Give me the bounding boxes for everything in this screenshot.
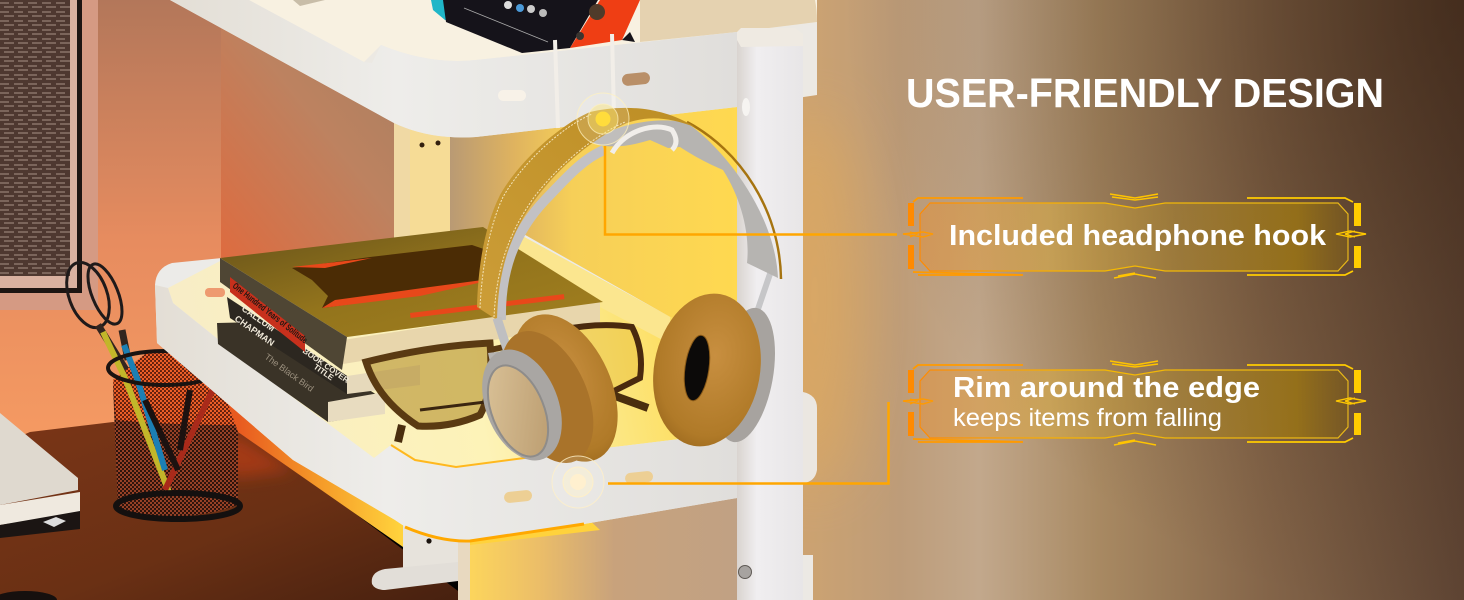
background wall left [0,0,461,440]
marker: headphone hook [577,93,629,145]
headband padding [590,120,778,278]
top shelf surface [249,0,817,62]
tan leather band [477,108,695,320]
lower shelf [155,232,737,541]
right end of lower shelf [803,392,817,483]
background wall right [765,0,1464,600]
top book: One Hundred Years of Solitude [231,281,309,345]
thin silver band [501,150,604,320]
bottom book [217,322,385,422]
bottom book: The Black Bird [263,352,316,394]
top book [220,227,603,370]
under-shelf light strip [225,395,600,547]
callout: rim around the edge: Rim around the edge [953,372,1260,404]
framed map poster [0,0,98,310]
middle book [227,297,420,394]
title: USER-FRIENDLY DESIGN [906,70,1384,116]
scissors [59,257,129,370]
middle book: BOOK COVER [301,346,351,385]
callout: rim around the edge: keeps items from falling [953,404,1222,432]
headphones [467,108,784,478]
connector line: rim [608,402,888,484]
connector line: hook [605,146,897,234]
yellow lit back panel [450,100,740,400]
stacked books on desk [0,413,80,538]
vertical post [737,28,813,600]
marker: shelf rim [552,456,604,508]
back pole [394,120,450,245]
callout: rim around the edge [903,361,1366,445]
panel under lower shelf [458,495,743,600]
middle book: CHAPMAN [233,313,276,348]
shelf clamp [372,525,470,600]
right ear cup [641,268,784,455]
headphone hook straps [555,34,614,128]
callout: included headphone hook [903,194,1366,278]
middle book: TITLE [312,362,336,383]
book stack on shelf [217,227,603,422]
hook [612,127,676,153]
shelf surface [168,233,737,467]
game console [293,0,640,53]
left ear cup [467,298,639,478]
top shelf [170,0,817,137]
pen holder [59,257,240,519]
wooden desk [0,422,470,600]
callout: included headphone hook: Included headphone hook [949,220,1327,252]
middle book: CALLUM [240,303,277,333]
glasses [366,325,648,442]
